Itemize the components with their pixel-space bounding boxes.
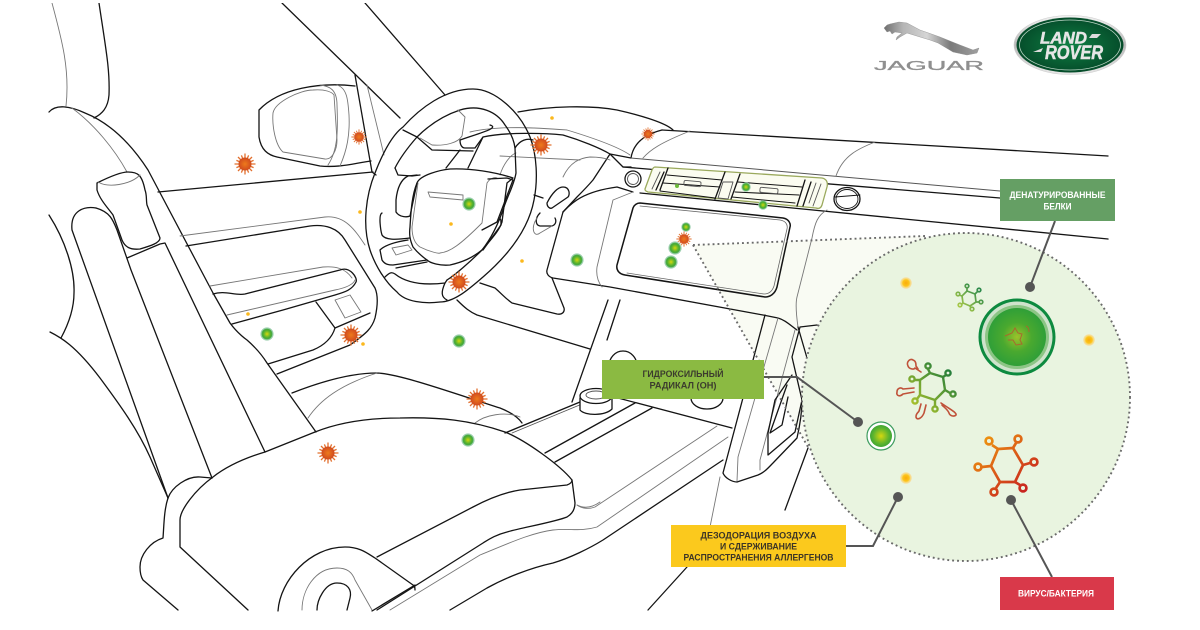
hydroxyl radical sphere — [867, 422, 895, 450]
inhibited virus molecule — [897, 359, 956, 419]
label: deodorisation — [671, 525, 846, 567]
label: virus or bacteria — [1000, 577, 1114, 610]
label: virus or bacteria: ВИРУС/БАКТЕРИЯ — [1018, 588, 1094, 598]
denatured protein sphere — [978, 298, 1056, 376]
leader line: deodorisation — [846, 492, 903, 546]
label: denatured proteins — [1000, 179, 1115, 221]
label: hydroxyl radical: РАДИКАЛ (ОН) — [650, 380, 716, 392]
leader line: hydroxyl radical — [764, 377, 863, 427]
hydroxyl radicals in the cabin — [260, 182, 768, 447]
dotted cone and circle outline — [693, 233, 1130, 561]
wing mirror — [259, 85, 371, 166]
label: hydroxyl radical — [602, 360, 764, 399]
leader line: denatured proteins — [1025, 221, 1055, 292]
label: denatured proteins: БЕЛКИ — [1044, 200, 1072, 212]
dashboard binnacle — [446, 107, 1108, 234]
detail circle — [802, 233, 1130, 561]
label: denatured proteins: ДЕНАТУРИРОВАННЫЕ — [1010, 189, 1106, 200]
allergen particles in detail circle — [900, 277, 1095, 484]
centre console — [390, 300, 732, 610]
virus molecule — [975, 436, 1037, 495]
logo: Land Rover — [1014, 16, 1126, 74]
logo: Land Rover: ROVER — [1045, 43, 1103, 64]
label: hydroxyl radical: ГИДРОКСИЛЬНЫЙ — [642, 368, 724, 380]
virus particles in the cabin — [234, 127, 692, 464]
logo: Jaguar — [874, 22, 984, 73]
centre dash top lines — [623, 142, 1108, 327]
label: deodorisation: И СДЕРЖИВАНИЕ — [720, 542, 798, 552]
allergen dots in the cabin — [246, 116, 554, 346]
label: deodorisation: ДЕЗОДОРАЦИЯ ВОЗДУХА — [700, 530, 817, 542]
leader line: virus — [1006, 495, 1052, 577]
logo: Jaguar: JAGUAR — [874, 59, 984, 73]
door panel — [158, 172, 377, 374]
console grab handle — [648, 315, 817, 610]
lower dash and steering column — [457, 187, 797, 349]
logo: Land Rover: LAND — [1040, 28, 1087, 48]
seat and headrest — [49, 3, 316, 498]
windscreen and pillar — [282, 3, 445, 175]
touch screen — [617, 203, 790, 297]
air vents — [645, 167, 827, 208]
steering wheel — [366, 89, 536, 303]
spotlight cone — [693, 236, 925, 447]
seat cushion and armrest — [140, 373, 600, 611]
label: deodorisation: РАСПРОСТРАНЕНИЯ АЛЛЕРГЕНОВ — [684, 552, 834, 564]
small green molecule — [956, 284, 983, 311]
